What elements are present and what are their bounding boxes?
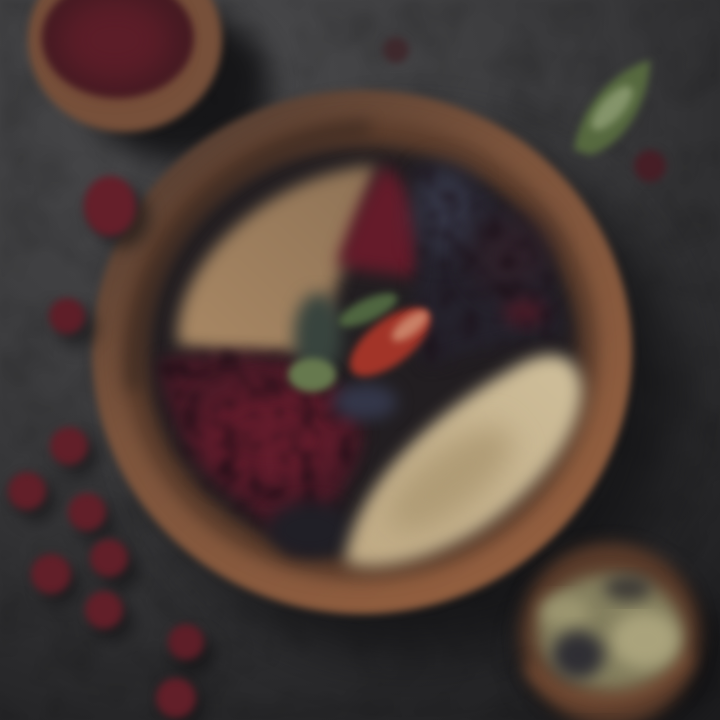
berry bbox=[156, 678, 196, 718]
berry bbox=[8, 472, 46, 510]
strawberry slice bbox=[339, 295, 441, 389]
shadow: bowl cast shadow bbox=[140, 133, 680, 657]
bowl inner wall bbox=[122, 120, 598, 580]
dish red berries bbox=[42, 0, 194, 98]
upper-left inner rim shadow bbox=[134, 128, 370, 390]
small dish dark seeds bbox=[552, 631, 604, 679]
oat wedge bbox=[178, 165, 376, 352]
centre bright leaf bbox=[334, 287, 402, 333]
berry bbox=[168, 624, 204, 660]
berry bbox=[50, 427, 88, 465]
bowl inner dark base bbox=[146, 146, 578, 558]
dish rim bbox=[28, 0, 222, 132]
cranberry wedge bbox=[160, 354, 362, 545]
centre dark stone bbox=[333, 384, 397, 420]
berry bbox=[49, 298, 85, 334]
top-left dish bbox=[28, 0, 222, 132]
blueberry lumps bbox=[422, 170, 549, 358]
berry shadows bbox=[17, 188, 216, 720]
small dish light flake left bbox=[541, 596, 589, 628]
small dish light flakes bbox=[611, 612, 679, 668]
cream oat wedge bbox=[345, 355, 582, 567]
small dish lower rim highlight bbox=[530, 655, 688, 699]
strawberry highlight bbox=[387, 305, 433, 347]
small dish contents bbox=[538, 574, 682, 690]
centre green leaf bbox=[288, 358, 336, 392]
berry bbox=[84, 176, 136, 236]
cream oat shading bbox=[372, 410, 528, 550]
bottom-right dish bbox=[520, 543, 700, 720]
small dish dark seed top bbox=[604, 575, 652, 601]
cranberry lumps bbox=[161, 347, 356, 508]
shadow: top-left dish bbox=[90, 10, 270, 160]
small dish rim bbox=[520, 543, 700, 720]
shadow: bottom-right dish bbox=[520, 565, 720, 720]
dish berry highlight bbox=[60, 0, 170, 82]
dark berries lower bbox=[268, 502, 352, 558]
berry bbox=[31, 554, 71, 594]
berry bbox=[90, 539, 128, 577]
large wooden bowl bbox=[92, 90, 632, 614]
blueberry area bbox=[413, 165, 565, 365]
green leaf top right bbox=[574, 60, 650, 155]
berry bbox=[68, 493, 106, 531]
leaf light centre bbox=[585, 80, 639, 136]
faint berry bbox=[383, 37, 409, 63]
leaf shape bbox=[574, 60, 650, 155]
centre herb leaves bbox=[294, 293, 342, 377]
berry bbox=[85, 591, 123, 629]
red berry wedge bbox=[337, 165, 421, 278]
cranberry highlight bbox=[198, 385, 342, 485]
berry bbox=[634, 150, 666, 182]
blueberry highlights bbox=[415, 168, 548, 327]
bowl rim bbox=[92, 90, 632, 614]
